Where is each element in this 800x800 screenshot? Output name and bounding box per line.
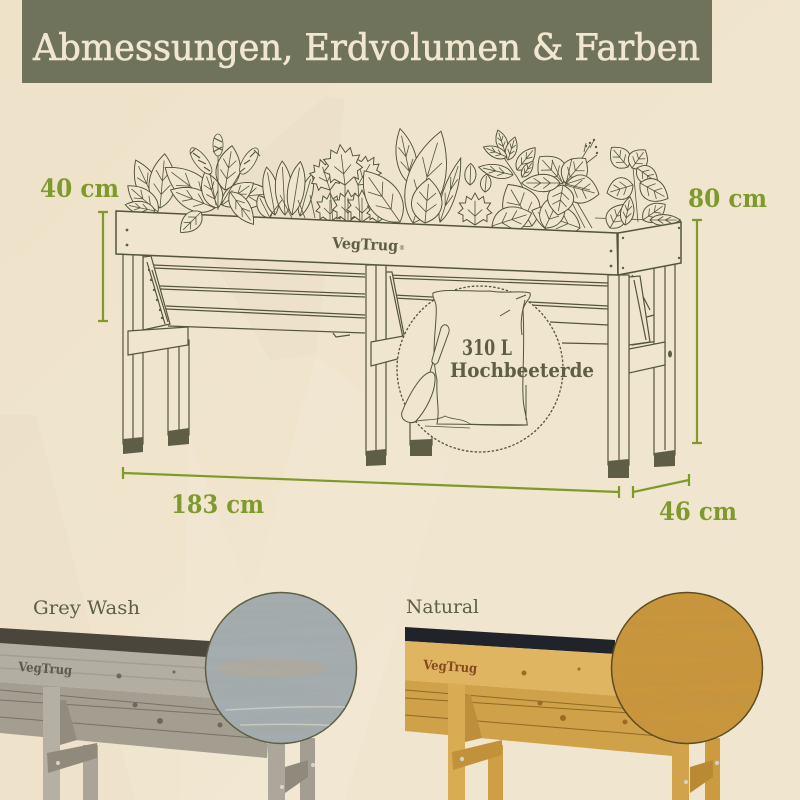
label: Grey Wash: Grey Wash [33,597,140,619]
hibiscus [570,140,597,178]
title banner: Abmessungen, Erdvolumen & Farben [32,28,700,69]
planter box [116,211,681,275]
flowering plant [213,144,244,192]
VegTrug logo grey: VegTrug [17,660,73,679]
dimension: 40 cm [40,174,119,321]
middle legs and brace [366,265,432,455]
large foliage leaves [492,175,548,235]
mint [633,167,638,222]
left spinach [126,156,168,213]
VegTrug logo natural: VegTrug [422,658,478,677]
rubber feet [123,428,675,478]
dimension: 46 cm [633,474,737,526]
title banner [22,0,712,83]
label: Natural: Natural [406,596,479,618]
swatch: grey wood [206,592,356,744]
VegTrug logo on planter: VegTrug [331,234,399,255]
overhanging leaves [174,187,261,239]
panel: natural planter [405,592,762,800]
leafy branch [500,152,533,205]
plant foliage [121,126,681,241]
planter line illustration [116,126,681,478]
left legs and brace [123,254,189,444]
chard [253,192,276,221]
parsley [305,155,345,195]
back slats [153,265,665,345]
soil volume text: 310 L [462,335,512,360]
icon: soil bag [433,290,530,425]
dimension: 80 cm: 80 cm [688,184,767,213]
soil volume circle: Hochbeeterde [450,358,594,382]
dimension: 183 cm [123,467,619,519]
swatch: natural wood [612,592,762,744]
panel: grey wash planter [0,592,356,800]
dimension: 183 cm: 183 cm [171,490,264,519]
soil volume circle [397,286,594,452]
dimension: 40 cm: 40 cm [40,174,119,203]
big spinach [390,127,422,187]
dimension: 80 cm [688,184,767,443]
VegTrug logo on planter: ® [399,245,405,252]
right legs and brace [608,263,675,465]
dimension: 46 cm: 46 cm [659,497,737,526]
icon: trowel [402,325,528,428]
